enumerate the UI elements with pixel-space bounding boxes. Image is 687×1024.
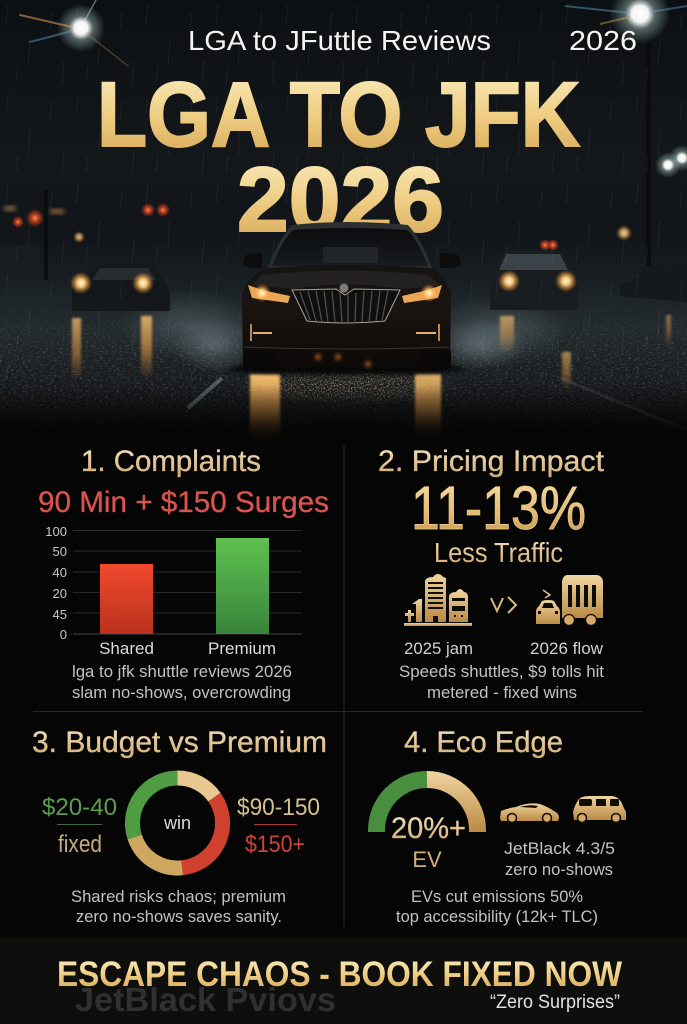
street lamp left	[20, 0, 128, 66]
rating text	[504, 839, 615, 879]
bumper line and wheels	[244, 347, 449, 349]
panel 4: eco edge	[368, 726, 626, 926]
headlights	[248, 285, 290, 303]
left background car	[70, 262, 170, 311]
budget price: fixed	[58, 831, 102, 858]
premium price	[237, 794, 320, 858]
caption: eco: EVs cut emissions 50%	[411, 887, 583, 906]
caption: complaints: slam no-shows, overcrowding	[72, 683, 291, 702]
icon labels	[404, 639, 604, 658]
mirrors	[243, 253, 262, 268]
top line: year: 2026	[569, 25, 637, 56]
heading: complaints: 1. Complaints	[81, 445, 261, 478]
icon labels: 2025 jam	[404, 639, 473, 658]
cabin	[266, 222, 434, 272]
caption: eco: top accessibility (12k+ TLC)	[396, 907, 598, 926]
top line: headline label: LGA to JFuttle Reviews	[188, 25, 491, 56]
traffic signals	[4, 203, 632, 251]
icon: car and shuttle	[536, 575, 603, 626]
main title: LGA TO JFK	[97, 64, 580, 166]
rating text: zero no-shows	[505, 860, 613, 879]
stat label: Less Traffic	[434, 537, 563, 568]
icon: van	[573, 796, 626, 822]
donut chart: win	[163, 813, 191, 833]
icon: city buildings	[404, 574, 472, 626]
spray mist	[173, 317, 526, 373]
caption: eco	[396, 887, 598, 926]
bar chart: 100	[45, 524, 67, 539]
main title: 2026	[237, 149, 444, 251]
caption: pricing: metered - fixed wins	[427, 683, 577, 702]
gauge chart: 20%+	[391, 812, 466, 845]
heading: budget vs premium: 3. Budget vs Premium	[32, 726, 327, 759]
caption: pricing: Speeds shuttles, $9 tolls hit	[399, 662, 604, 681]
callout: surges: 90 Min + $150 Surges	[38, 486, 329, 519]
budget price	[42, 794, 117, 858]
rain overlay	[0, 0, 687, 380]
street lamp right	[565, 0, 687, 44]
hero photo: rainy night street with black sedan	[0, 0, 687, 440]
lane markings	[188, 378, 687, 430]
caption: budget: Shared risks chaos; premium	[71, 887, 286, 906]
bar chart: 20	[53, 586, 67, 601]
icon labels: 2026 flow	[530, 639, 604, 658]
bar chart: 40	[53, 565, 67, 580]
tagline: “Zero Surprises”	[490, 992, 620, 1013]
caption: budget	[71, 887, 286, 926]
far right lamps	[655, 145, 687, 178]
caption: complaints: lga to jfk shuttle reviews 2026	[72, 662, 292, 681]
icon: sedan	[500, 803, 559, 822]
panel 1: complaints	[38, 445, 329, 702]
wet speckled reflection under car	[242, 370, 453, 404]
rating text: JetBlack 4.3/5	[504, 839, 615, 858]
premium price: $150+	[245, 831, 305, 858]
caption: pricing	[399, 662, 604, 702]
lower body	[242, 265, 451, 369]
footer banner	[0, 937, 687, 1024]
big stat: 11-13%	[411, 474, 586, 542]
panel 2: pricing impact	[378, 445, 605, 702]
badge	[340, 284, 348, 292]
ghost footer text: JetBlack Pviovs	[75, 981, 336, 1018]
horizontal divider	[33, 711, 642, 712]
panel 3: budget vs premium	[32, 726, 327, 926]
heading: pricing impact: 2. Pricing Impact	[378, 445, 605, 478]
budget price: $20-40	[42, 794, 117, 821]
bar chart: Premium	[208, 639, 276, 658]
distant buildings and poles	[0, 40, 651, 280]
donut chart	[132, 778, 223, 868]
bar chart: 45	[53, 607, 67, 622]
vertical divider	[344, 445, 345, 927]
bar chart: 50	[53, 544, 67, 559]
black sedan	[228, 222, 464, 375]
bar chart: Shared	[99, 639, 154, 658]
icon: comparison arrow	[491, 597, 516, 613]
main title	[97, 64, 580, 251]
bar chart: 0	[60, 627, 67, 642]
gauge chart	[368, 771, 486, 872]
call to action: ESCAPE CHAOS - BOOK FIXED NOW	[57, 955, 622, 994]
caption: budget: zero no-shows saves sanity.	[76, 907, 282, 926]
premium price: $90-150	[237, 794, 320, 821]
bar chart	[45, 524, 302, 658]
fade from photo to black	[0, 385, 687, 445]
heading: eco edge: 4. Eco Edge	[404, 726, 563, 759]
caption: complaints	[72, 662, 292, 702]
gauge chart: EV	[412, 847, 442, 872]
grille	[292, 289, 400, 323]
right background car	[490, 249, 687, 310]
fog lights	[253, 332, 272, 334]
road reflections	[72, 315, 671, 440]
